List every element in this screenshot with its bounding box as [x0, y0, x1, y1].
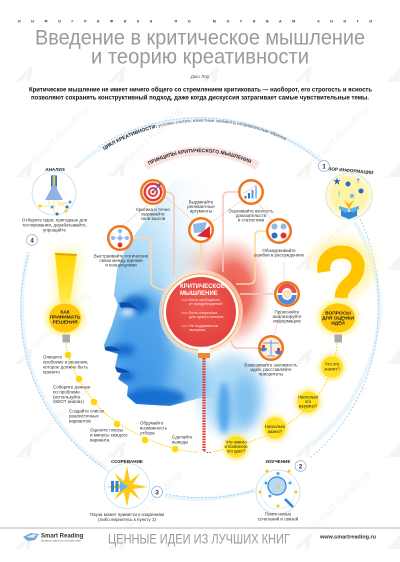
badge 4: 4	[30, 238, 34, 244]
principle: evidence chart: доказательств	[236, 213, 267, 218]
badge 1	[318, 160, 330, 172]
top label: ИНФОГРАФИКА ПО МОТИВАМ КНИГИ	[18, 20, 372, 24]
watermark pattern: Smart Reading	[309, 199, 372, 262]
decision steps text: которое должно быть	[43, 364, 88, 370]
footer slogan: ЦЕННЫЕ ИДЕИ ИЗ ЛУЧШИХ КНИГ	[108, 532, 291, 546]
step 3: incubation	[90, 459, 164, 522]
questions path: это	[305, 399, 312, 404]
questions path: Насколько	[265, 424, 286, 429]
principle: scales: Взвешивайте значимость	[244, 362, 298, 368]
principle: arguments: релевантные	[187, 204, 215, 209]
questions path: важно?	[268, 429, 283, 434]
exclamation mark	[55, 252, 78, 304]
principle: logical links: связи между идеями	[99, 258, 143, 263]
principle: errors: ошибки в рассуждениях	[254, 252, 305, 258]
step 4: analysis: Отберите идеи, пригодные для	[22, 218, 88, 222]
decision steps text: (используйте	[53, 394, 81, 400]
principle: arguments: аргументы	[190, 208, 212, 214]
watermark pattern: Smart Reading	[309, 469, 372, 532]
how to make decisions coin: РЕШЕНИЯ	[53, 320, 78, 326]
intro text	[29, 86, 372, 102]
step 1: information gathering: ★	[333, 177, 341, 186]
cycle heading arc: ЦИКЛ КРЕАТИВНОСТИ: условно считать известные элементы нетривиальным образом	[102, 119, 286, 150]
decision steps text: отбора	[140, 430, 155, 436]
watermark pattern: Smart Reading	[29, 289, 92, 352]
central circle: critical thinking: от предубеждений	[189, 301, 222, 306]
principle: scales: приоритеты	[259, 372, 283, 376]
decision steps text: реалистичных	[69, 414, 100, 418]
red glow behind centre	[143, 228, 274, 352]
neck glow	[200, 355, 264, 435]
questions path: значит?	[324, 366, 340, 372]
decision steps text	[43, 354, 193, 444]
decision steps text: Оцените плюсы	[90, 428, 123, 432]
step 4: analysis: упрощайте	[43, 226, 66, 232]
principle: scales	[244, 335, 298, 376]
decision steps text: Сделайте	[172, 434, 193, 440]
intro text: позволяют сохранять конструктивный подход, даже когда дискуссия затрагивает самые чувствительные темы.	[31, 94, 369, 102]
central circle: critical thinking: эмоциям	[189, 327, 205, 332]
watermark pattern: Smart Reading	[29, 384, 92, 447]
decision steps text: принято	[43, 370, 60, 374]
principle: errors: Обнаруживайте	[262, 247, 296, 253]
central circle: critical thinking: для чужого мнения	[189, 314, 224, 319]
step 2: study: сочетаний и связей	[258, 516, 299, 522]
step 2: study: ИЗУЧЕНИЕ	[266, 459, 290, 464]
principle: clarify information: информацию	[273, 318, 302, 324]
decision steps text: Опишите	[43, 354, 63, 360]
title	[35, 26, 365, 68]
how to make decisions coin: ПРИНИМАТЬ	[50, 314, 81, 320]
connector lines	[122, 192, 284, 348]
title: и теорию креативности	[91, 46, 309, 68]
principle: logical links	[94, 225, 149, 268]
principle: arguments	[187, 198, 215, 243]
creativity cycle ring	[21, 118, 380, 499]
questions coin: ДЛЯ ОЦЕНКИ	[322, 316, 354, 322]
questions coin	[318, 301, 358, 342]
principle: clarify information: анализируйте	[273, 313, 302, 319]
title: Введение в критическое мышление	[35, 26, 365, 50]
decision steps text: SWOT анализ)	[53, 399, 84, 404]
badge 1: 1	[322, 164, 326, 170]
step 4: analysis: тестирования, дорабатывайте,	[22, 222, 87, 228]
step 1: information gathering: ★	[348, 192, 356, 200]
principles banner: ПРИНЦИПЫ КРИТИЧЕСКОГО МЫШЛЕНИЯ	[148, 148, 252, 165]
watermark pattern: Smart Reading	[309, 384, 372, 447]
how to make decisions coin	[46, 301, 84, 342]
head silhouette	[104, 178, 214, 406]
badge 3: 3	[155, 490, 159, 496]
principle: clarify information: Проясняйте	[275, 308, 300, 314]
central circle: critical thinking: КРИТИЧЕСКОЕ	[180, 284, 225, 290]
badge 3	[152, 486, 162, 498]
questions path: Что это	[325, 362, 340, 366]
questions path: разумно?	[299, 404, 318, 408]
central circle: critical thinking: Быть свободным	[189, 297, 220, 302]
decision steps text: Обдумайте	[140, 420, 164, 426]
principle: target: свои мысли	[141, 216, 166, 221]
central circle: critical thinking	[159, 270, 243, 354]
decision steps text: выводы	[172, 440, 188, 444]
decision steps text: Соберите данные	[53, 384, 91, 390]
footer website: www.smartreading.ru	[319, 534, 376, 540]
questions coin: ВОПРОСЫ	[325, 310, 351, 316]
step 4: analysis: АНАЛИЗ	[45, 167, 65, 172]
step 3: incubation: Пауза может привести к озарениям	[90, 512, 164, 517]
decision steps text: вариантов	[69, 418, 91, 424]
questions path: Насколько	[298, 394, 319, 400]
watermark pattern: Smart Reading	[29, 104, 92, 167]
principle: target: выражайте	[141, 210, 165, 216]
principle: evidence chart	[229, 179, 274, 222]
step 1: information gathering: !	[338, 192, 340, 198]
footer divider	[0, 527, 400, 529]
central circle: critical thinking: Быть открытым	[189, 310, 217, 315]
step 1: information gathering	[325, 166, 374, 219]
central circle: critical thinking: Не поддаваться	[189, 323, 218, 328]
principle: clarify information	[273, 281, 302, 324]
questions path	[212, 343, 344, 459]
author: Джо Лау	[191, 74, 210, 80]
principle: errors	[254, 218, 305, 258]
footer logo: Ценные идеи из лучших книг	[41, 538, 81, 542]
step 3: incubation: СОЗРЕВАНИЕ	[111, 459, 143, 464]
badge 4	[26, 234, 38, 246]
decision path	[65, 343, 198, 452]
principle: evidence chart: и статистики	[238, 218, 265, 222]
watermark pattern: Smart Reading	[309, 104, 372, 167]
questions path: Что нового	[225, 440, 247, 444]
watermark pattern: Smart Reading	[122, 469, 185, 532]
questions path: и полезного	[224, 444, 248, 449]
badge 2	[295, 460, 306, 472]
plug and red dotted line	[198, 347, 212, 453]
principle: logical links: Выстраивайте логические	[94, 252, 149, 258]
step 3: incubation: (либо вернитесь к пункту 1)	[98, 517, 156, 522]
footer logo: Smart Reading	[41, 534, 84, 540]
badge 2: 2	[299, 464, 303, 470]
principle: scales: идей, расставляйте	[250, 366, 292, 372]
step 1: information gathering: СБОР ИНФОРМАЦИИ	[325, 166, 374, 175]
principle: evidence chart: Оценивайте вескость	[229, 208, 274, 214]
intro text: Критическое мышление не имеет ничего общего со стремлением критиковать — наоборот, его строгость и ясность	[29, 86, 372, 94]
how to make decisions coin: КАК	[60, 310, 70, 316]
decision steps text: и минусы каждого	[90, 432, 128, 438]
central circle: critical thinking: МЫШЛЕНИЕ	[180, 291, 218, 297]
watermark pattern: Smart Reading	[122, 104, 185, 167]
principle: target	[136, 179, 170, 221]
step 1: information gathering: ?	[356, 179, 360, 185]
questions coin: ИДЕЙ	[331, 318, 345, 326]
decision steps text: Создайте список	[69, 408, 104, 414]
footer logo	[23, 533, 84, 542]
step 2: study	[256, 459, 300, 522]
decision steps text: возможность	[140, 426, 168, 430]
step 2: study: Поиск новых	[265, 512, 292, 516]
questions path: это дает?	[227, 448, 246, 454]
principle: logical links: и концепциями	[105, 262, 137, 268]
decision steps text: по проблеме	[53, 390, 80, 394]
question mark	[320, 247, 365, 298]
principle: arguments: Выдвигайте	[189, 198, 214, 204]
decision steps text: проблему и решения,	[43, 360, 88, 364]
decision steps text: варианта	[90, 438, 110, 442]
principle: target: Критика и точно	[136, 207, 170, 212]
step 4: analysis	[22, 167, 88, 232]
